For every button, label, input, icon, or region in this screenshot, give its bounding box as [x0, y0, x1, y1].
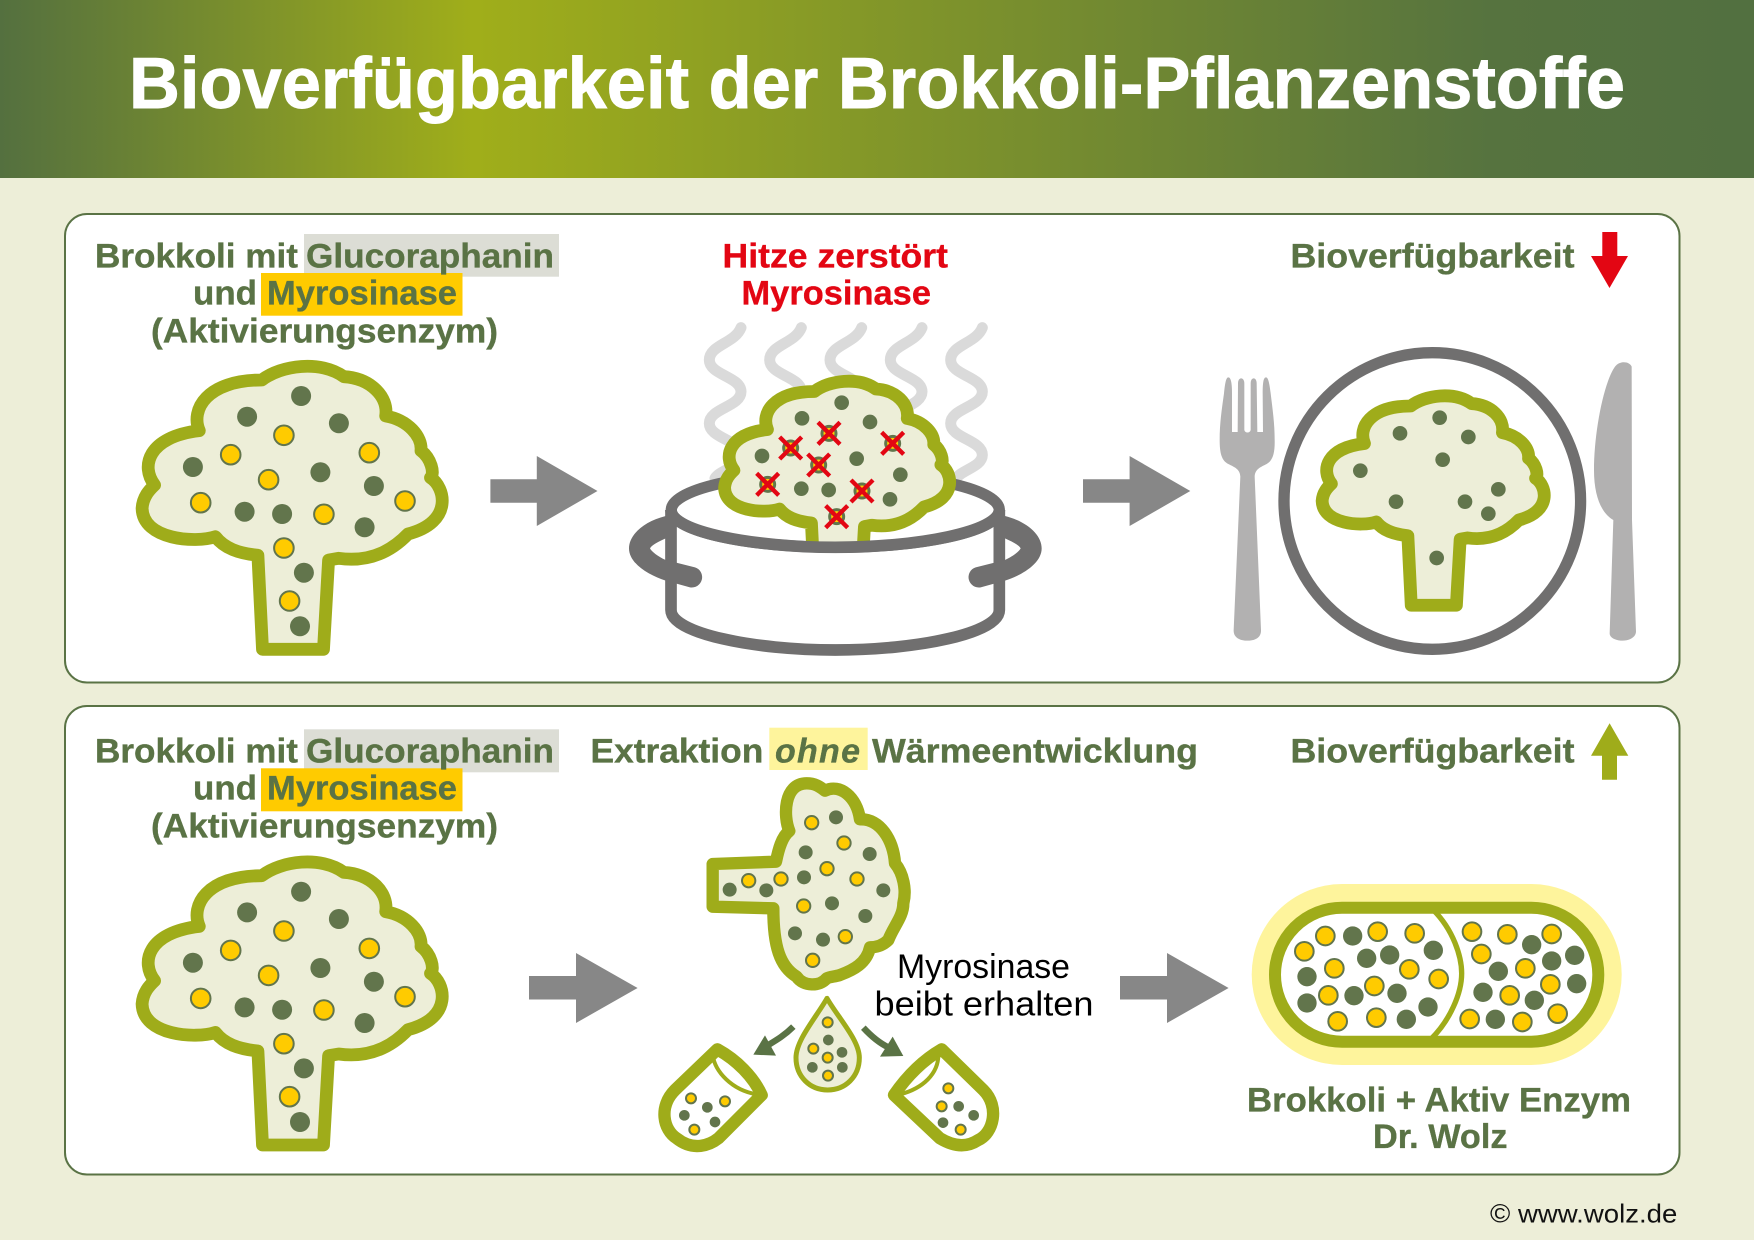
heading: broccoli with glucoraphanin and myrosinase: [95, 729, 559, 845]
copyright: © www.wolz.de: [1490, 1199, 1677, 1229]
heading: broccoli with glucoraphanin and myrosinase: Glucoraphanin: [306, 237, 554, 275]
arrow: to capsule: [1120, 953, 1229, 1023]
icon: pot rim back: [671, 473, 999, 547]
heading: bioavailability low: Bioverfügbarkeit: [1290, 237, 1574, 275]
header banner: [0, 0, 1754, 178]
arrow: to plate: [1083, 456, 1190, 526]
title: Bioverfügbarkeit der Brokkoli-Pflanzenstoffe: [129, 44, 1625, 124]
arrow: extract to left capsule half: [753, 1027, 793, 1056]
nutrient dots with red crosses: [755, 395, 908, 528]
icon: extract drop: [796, 998, 859, 1090]
heading: broccoli with glucoraphanin and myrosinase: Myrosinase: [267, 274, 457, 312]
text: product name: [1247, 1082, 1631, 1156]
icon: pot front: [629, 510, 1042, 650]
heading: heat destroys myrosinase: Myrosinase: [742, 274, 931, 312]
heading: heat destroys myrosinase: Hitze zerstört: [722, 238, 948, 276]
icon: red down arrow: [1591, 232, 1628, 288]
icon: plate: [1284, 353, 1581, 649]
text: myrosinase is preserved: [874, 948, 1094, 1024]
pot handle left: [629, 516, 702, 587]
text: myrosinase is preserved: Myrosinase: [897, 948, 1070, 986]
heading: broccoli with glucoraphanin and myrosinase: Glucoraphanin: [306, 732, 554, 770]
text: product name: Brokkoli + Aktiv Enzym: [1247, 1082, 1631, 1120]
icon: fork: [1220, 377, 1275, 641]
heading: extraction without heat: ohne: [775, 732, 860, 770]
arrow: to cooking: [490, 456, 598, 526]
icon: knife: [1594, 362, 1636, 641]
icon: green up arrow: [1591, 723, 1628, 780]
icon: broccoli in pot: [718, 374, 956, 542]
heading: broccoli with glucoraphanin and myrosinase: und: [193, 769, 257, 807]
arrow: extract to right capsule half: [863, 1028, 903, 1057]
text: product name: Dr. Wolz: [1373, 1118, 1508, 1156]
heading: broccoli with glucoraphanin and myrosinase: (Aktivierungsenzym): [151, 312, 498, 350]
icon: steam: [709, 328, 982, 478]
heading: bioavailability high: Bioverfügbarkeit: [1290, 732, 1574, 770]
heading: broccoli with glucoraphanin and myrosinase: [95, 234, 559, 350]
icon: left capsule half: [664, 1049, 762, 1146]
arrow: to extraction: [529, 953, 638, 1023]
heading: heat destroys myrosinase: [722, 238, 948, 312]
heading: extraction without heat: [590, 728, 1198, 770]
heading: broccoli with glucoraphanin and myrosinase: Myrosinase: [267, 769, 457, 807]
text: myrosinase is preserved: beibt erhalten: [874, 986, 1094, 1024]
pot handle right: [969, 516, 1042, 587]
icon: broccoli with nutrients: [142, 862, 442, 1145]
panel: conventional cooking: [65, 214, 1680, 682]
heading: broccoli with glucoraphanin and myrosinase: Brokkoli mit: [95, 732, 298, 770]
panel: cold extraction: [65, 706, 1680, 1174]
icon: pressed broccoli: [713, 783, 905, 984]
heading: extraction without heat: Extraktion: [590, 732, 763, 770]
icon: capsule with nutrients: [1252, 884, 1622, 1065]
heading: extraction without heat: Wärmeentwicklung: [872, 732, 1198, 770]
heading: broccoli with glucoraphanin and myrosinase: (Aktivierungsenzym): [151, 807, 498, 845]
icon: broccoli on plate: [1322, 396, 1544, 605]
heading: broccoli with glucoraphanin and myrosinase: Brokkoli mit: [95, 237, 298, 275]
heading: broccoli with glucoraphanin and myrosinase: und: [193, 274, 257, 312]
icon: broccoli with nutrients: [142, 366, 442, 649]
icon: right capsule half: [894, 1049, 993, 1145]
